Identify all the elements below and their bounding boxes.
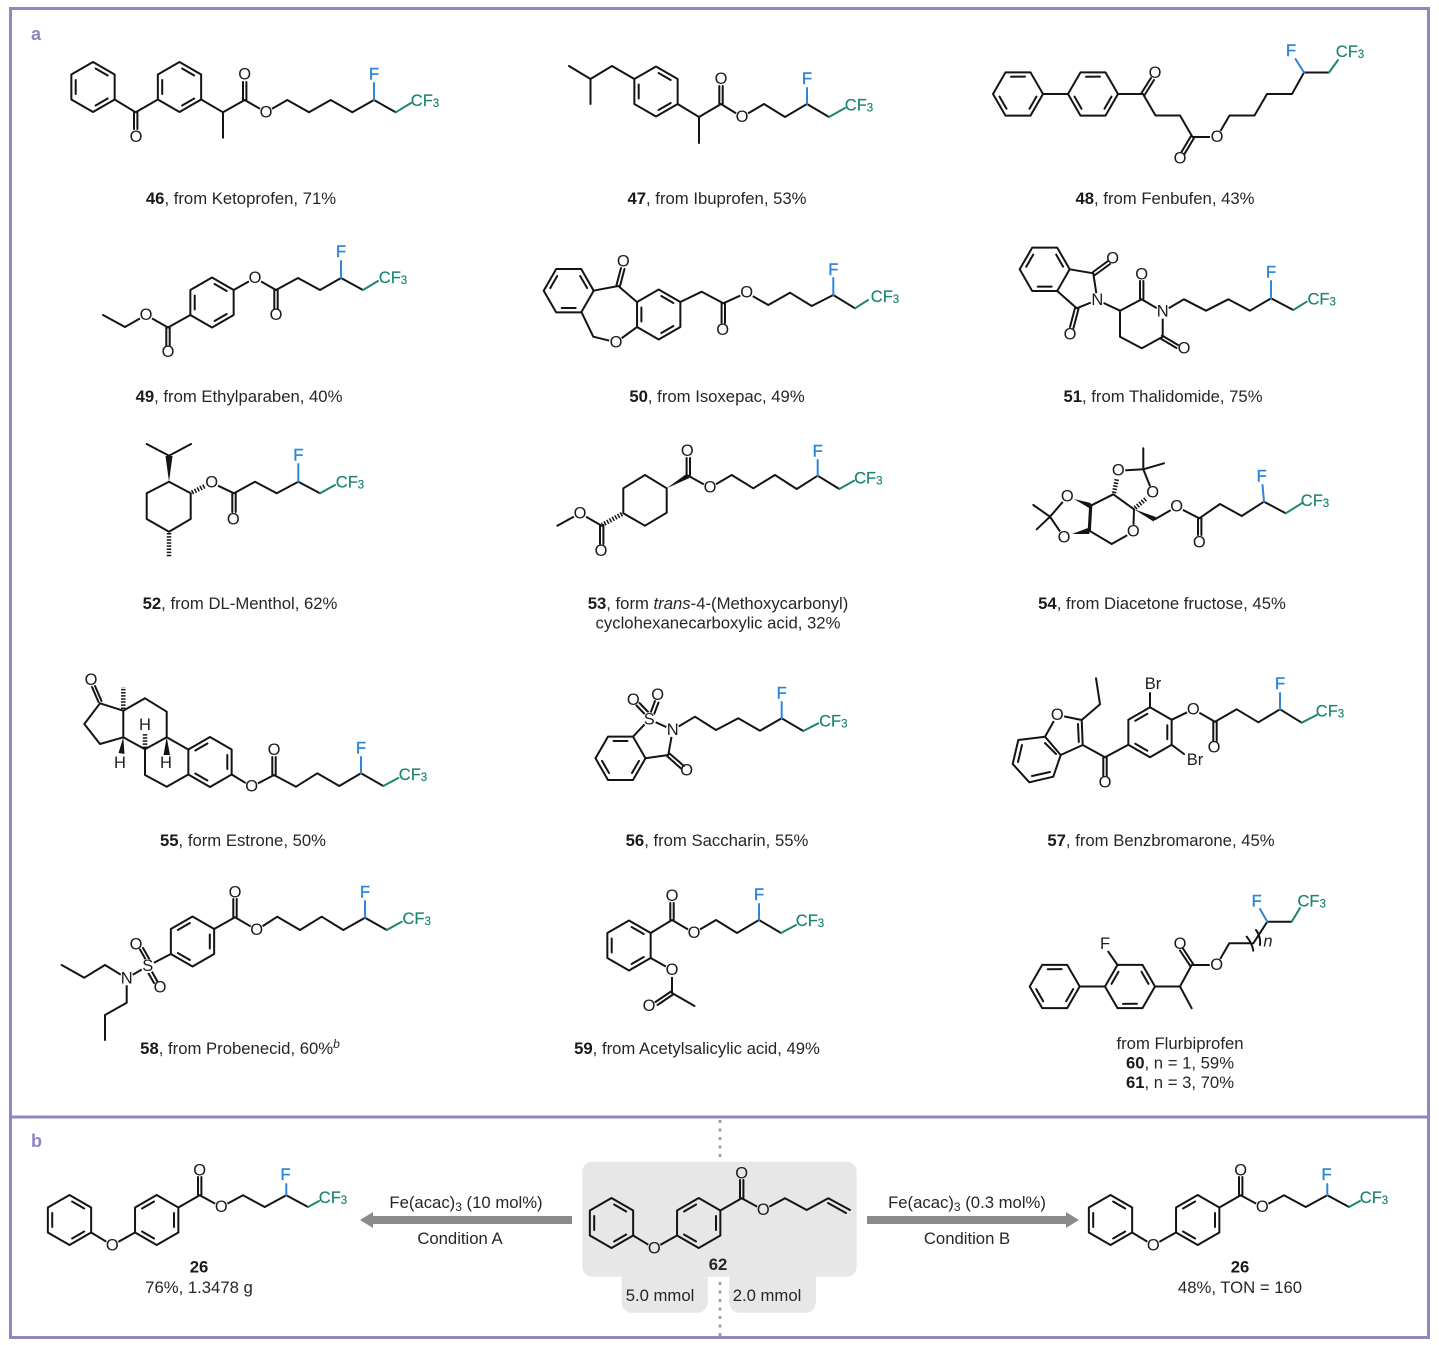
structure 58: O — [250, 921, 263, 939]
structure 54: O — [1061, 488, 1074, 506]
structure 60/61: O — [1210, 956, 1223, 974]
structure 49: CF — [379, 269, 401, 287]
caption 59: 59, from Acetylsalicylic acid, 49% — [574, 1039, 820, 1058]
tab: 5.0 mmol — [622, 1260, 708, 1313]
condition A text: Fe(acac) — [389, 1193, 455, 1212]
compound 59 — [574, 886, 824, 1058]
structure 56: S — [644, 710, 655, 728]
structure 55: O — [245, 778, 258, 796]
compound 56 — [589, 684, 848, 850]
structure 51: N — [1157, 303, 1169, 321]
caption 57: 57, from Benzbromarone, 45% — [1047, 831, 1275, 850]
structure 46 — [71, 62, 439, 146]
condition B text — [888, 1193, 1046, 1248]
structure 49: O — [140, 306, 153, 324]
structure 49: O — [270, 306, 283, 324]
structure 55: O — [268, 741, 281, 759]
structure 47: O — [715, 70, 728, 88]
structure 53: 3 — [876, 475, 883, 487]
structure 57: O — [1051, 706, 1064, 724]
structure 60/61 — [1023, 893, 1326, 1019]
condition B text: Fe(acac) — [888, 1193, 954, 1212]
condition B text: (0.3 mol%) — [961, 1193, 1046, 1212]
structure 60/61: F — [1100, 935, 1110, 953]
structure 62: O — [735, 1164, 748, 1182]
compounds 60 and 61 — [1023, 893, 1326, 1092]
panel label b: b — [31, 1131, 42, 1151]
caption 60 and 61: , n = 3, 70% — [1145, 1073, 1234, 1092]
structure 26 right: O — [1147, 1236, 1160, 1254]
caption 49: 49, from Ethylparaben, 40% — [136, 387, 343, 406]
structure 57: 3 — [1338, 709, 1344, 721]
panel: substrate 62 with scale tabs — [582, 1162, 857, 1313]
structure 52: CF — [336, 474, 358, 492]
structure 54: 3 — [1323, 498, 1329, 510]
structure 56 — [589, 684, 848, 791]
caption 26 right: 48%, TON = 160 — [1178, 1278, 1302, 1297]
structure 54: O — [1112, 462, 1125, 480]
structure 58 — [62, 883, 431, 1040]
caption 58: 58, from Probenecid, 60% — [140, 1039, 333, 1058]
structure 56: F — [777, 684, 787, 702]
structure 54: O — [1146, 484, 1159, 502]
arrow: to condition B — [867, 1212, 1079, 1228]
structure 49 — [103, 243, 407, 361]
structure 58: N — [121, 969, 133, 987]
structure 53: O — [704, 479, 717, 497]
structure 55: CF — [399, 766, 421, 784]
structure 52: O — [227, 510, 240, 528]
compound 47 — [569, 66, 873, 208]
caption 60 and 61: 61 — [1126, 1073, 1145, 1092]
structure 59: CF — [796, 912, 818, 930]
structure 59 — [607, 886, 824, 1015]
grey substrate box — [582, 1162, 857, 1277]
compound 49 — [103, 243, 407, 406]
structure 57: CF — [1316, 703, 1338, 721]
structure 51 — [1013, 237, 1336, 357]
condition A text: Condition A — [417, 1229, 504, 1248]
compound 52 — [143, 444, 364, 613]
structure 53: F — [813, 443, 823, 461]
structure 56: O — [680, 762, 693, 780]
structure 49: F — [336, 243, 346, 261]
structure 26 right: 3 — [1382, 1195, 1388, 1207]
condition B text: Condition B — [924, 1229, 1010, 1248]
structure 48: 3 — [1358, 49, 1364, 61]
structure 51: N — [1091, 291, 1103, 309]
structure 56: CF — [819, 713, 841, 731]
structure 48: CF — [1336, 43, 1358, 61]
structure 54: CF — [1301, 492, 1323, 510]
structure 47: O — [736, 108, 749, 126]
structure 55: H — [114, 754, 126, 772]
caption 58: b — [333, 1037, 340, 1051]
structure 57: O — [1208, 738, 1221, 756]
condition B text: 3 — [954, 1200, 961, 1214]
structure 58: CF — [402, 910, 424, 928]
compound 54 — [1033, 448, 1329, 613]
structure 48: O — [1149, 64, 1162, 82]
structure 60/61: O — [1174, 935, 1187, 953]
condition A text: (10 mol%) — [462, 1193, 543, 1212]
structure 54: O — [1127, 523, 1140, 541]
structure 52: O — [205, 474, 218, 492]
structure 52: F — [293, 447, 303, 465]
structure 58: O — [229, 883, 242, 901]
structure 57 — [1013, 675, 1344, 792]
structure 49: O — [162, 343, 175, 361]
structure 46: F — [369, 66, 379, 84]
caption 26 right: 26 — [1231, 1258, 1249, 1276]
compound 55 — [84, 671, 427, 850]
tab: 5.0 mmol: 5.0 mmol — [626, 1286, 694, 1305]
structure 56: 3 — [841, 719, 848, 731]
caption 54: 54, from Diacetone fructose, 45% — [1038, 594, 1286, 613]
structure 53: O — [595, 542, 608, 560]
compound 51 — [1013, 237, 1336, 406]
caption 53: 53, form trans-4-(Methoxycarbonyl) — [588, 594, 848, 613]
structure 26 left: F — [280, 1166, 291, 1184]
structure 47: CF — [845, 96, 867, 114]
structure 58: 3 — [424, 916, 431, 928]
structure 50: CF — [871, 288, 893, 306]
structure 46: O — [260, 103, 273, 121]
structure 60/61: F — [1252, 893, 1262, 911]
structure 54: O — [1193, 533, 1206, 551]
structure 57: O — [1187, 700, 1200, 718]
caption 60 and 61: 60 — [1126, 1054, 1145, 1072]
structure 55: H — [160, 754, 172, 772]
structure 57: O — [1099, 774, 1112, 792]
structure 46: 3 — [433, 98, 439, 110]
structure 26 left: 3 — [341, 1195, 347, 1207]
structure 51: O — [1106, 249, 1119, 267]
structure 58: O — [154, 978, 167, 996]
structure 49: 3 — [401, 275, 407, 287]
structure 26 right: CF — [1360, 1189, 1382, 1207]
structure 55: F — [356, 739, 366, 757]
structure 51: O — [1064, 325, 1077, 343]
structure 50 — [537, 253, 899, 351]
structure 50: 3 — [893, 294, 899, 306]
caption 48: 48, from Fenbufen, 43% — [1075, 189, 1255, 208]
caption 46: 46, from Ketoprofen, 71% — [146, 189, 336, 208]
structure 54: F — [1257, 468, 1267, 486]
caption 26 left: 26 — [190, 1258, 208, 1276]
structure 51: 3 — [1329, 296, 1336, 308]
compound 50 — [537, 253, 899, 406]
structure 59: 3 — [818, 918, 824, 930]
structure 46: CF — [411, 92, 433, 110]
caption 47: 47, from Ibuprofen, 53% — [627, 189, 807, 208]
structure 53: CF — [854, 469, 876, 487]
structure 57: Br — [1187, 751, 1204, 769]
structure 59: O — [643, 997, 656, 1015]
structure 26 left — [48, 1161, 347, 1254]
product 26, condition A — [48, 1161, 347, 1297]
structure 58: S — [142, 957, 153, 975]
structure 56: N — [667, 721, 679, 739]
caption 50: 50, from Isoxepac, 49% — [629, 387, 805, 406]
caption 26 left: 76%, 1.3478 g — [145, 1278, 253, 1297]
label 62: 62 — [709, 1255, 727, 1274]
structure 62 — [590, 1164, 850, 1257]
structure 51: O — [1135, 265, 1148, 283]
structure 57: F — [1275, 675, 1285, 693]
structure 47: F — [802, 70, 812, 88]
structure 26 right: F — [1321, 1166, 1332, 1184]
structure 26 left: CF — [319, 1189, 341, 1207]
compound 53 — [557, 442, 883, 632]
structure 60/61: n — [1263, 933, 1273, 951]
structure 55: O — [85, 671, 98, 689]
structure 52: 3 — [358, 480, 364, 492]
structure 57: Br — [1145, 675, 1162, 693]
compound 57 — [1013, 675, 1344, 850]
structure 46: O — [130, 128, 143, 146]
structure 26 left: O — [215, 1198, 228, 1216]
structure 51: CF — [1307, 290, 1329, 308]
structure 46: O — [238, 65, 251, 83]
structure 50: O — [610, 333, 623, 351]
structure 58: O — [130, 935, 143, 953]
tab: 2.0 mmol — [729, 1260, 816, 1313]
structure 26 right: O — [1234, 1161, 1247, 1179]
structure 54: O — [1058, 528, 1071, 546]
structure 55: 3 — [421, 772, 427, 784]
compound 48 — [987, 42, 1364, 208]
dotted divider — [719, 1120, 721, 1336]
structure 62: O — [648, 1239, 661, 1257]
structure 48: O — [1174, 150, 1187, 168]
structure 51: F — [1266, 263, 1276, 281]
structure 53 — [557, 442, 883, 560]
structure 49: O — [249, 269, 262, 287]
structure 47 — [569, 66, 873, 143]
structure 59: O — [688, 924, 701, 942]
caption 51: 51, from Thalidomide, 75% — [1063, 387, 1263, 406]
structure 26 right: O — [1256, 1198, 1269, 1216]
structure 48 — [987, 42, 1364, 168]
panel b: scale-up reactions — [31, 1120, 1388, 1336]
caption 60 and 61: , n = 1, 59% — [1145, 1054, 1234, 1072]
product 26, condition B — [1089, 1161, 1388, 1297]
structure 50: O — [617, 253, 630, 271]
structure 50: O — [716, 321, 729, 339]
structure 50: F — [828, 261, 838, 279]
panel a: late-stage substrates — [31, 24, 1364, 1092]
structure 54: O — [1170, 498, 1183, 516]
structure 56: O — [651, 686, 664, 704]
structure 26 left: O — [193, 1161, 206, 1179]
structure 52 — [147, 444, 364, 557]
structure 50: O — [740, 284, 753, 302]
structure 26 left: O — [106, 1236, 119, 1254]
structure 26 right — [1089, 1161, 1388, 1254]
caption 53: cyclohexanecarboxylic acid, 32% — [596, 614, 841, 632]
structure 47: 3 — [867, 102, 873, 114]
structure 48: O — [1211, 128, 1224, 146]
arrow: to condition A — [360, 1212, 572, 1228]
caption 56: 56, from Saccharin, 55% — [626, 831, 809, 850]
structure 59: O — [666, 961, 679, 979]
tab: 2.0 mmol: 2.0 mmol — [733, 1286, 801, 1305]
structure 58: F — [360, 884, 370, 902]
compound 58 — [62, 883, 431, 1058]
structure 53: O — [574, 504, 587, 522]
structure 51: O — [1178, 339, 1191, 357]
structure 59: F — [754, 886, 764, 904]
condition A text — [389, 1193, 543, 1248]
caption 60 and 61: from Flurbiprofen — [1116, 1034, 1244, 1053]
compound 46 — [71, 62, 439, 208]
structure 60/61: 3 — [1319, 899, 1326, 911]
caption 52: 52, from DL-Menthol, 62% — [143, 594, 338, 613]
condition A text: 3 — [455, 1200, 462, 1214]
structure 55: H — [139, 716, 151, 734]
structure 54 — [1033, 448, 1329, 551]
caption 55: 55, form Estrone, 50% — [160, 831, 326, 850]
structure 59: O — [666, 887, 679, 905]
structure 48: F — [1286, 42, 1296, 60]
structure 56: O — [627, 691, 640, 709]
panel label a: a — [31, 24, 42, 44]
structure 53: O — [681, 442, 694, 460]
structure 60/61: CF — [1297, 893, 1319, 911]
structure 55 — [84, 671, 427, 796]
structure 62: O — [757, 1201, 770, 1219]
